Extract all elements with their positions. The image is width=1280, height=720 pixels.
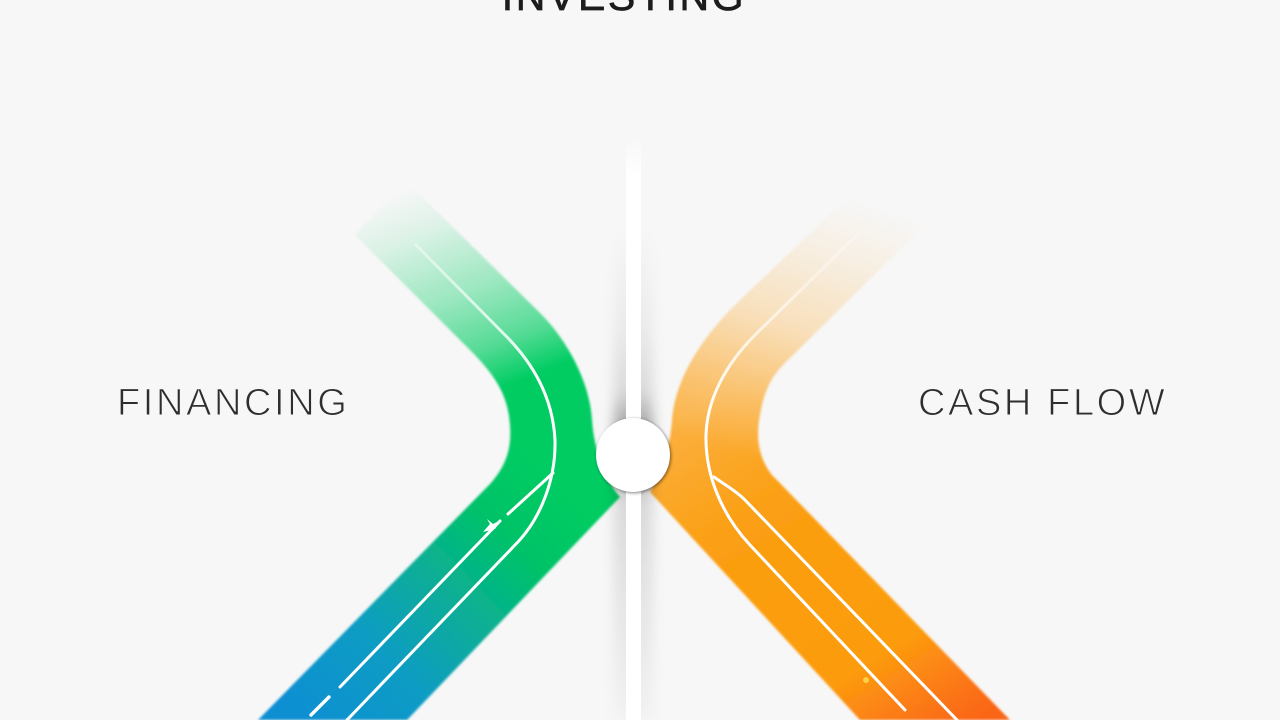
white lane line: long dash bbox=[340, 521, 500, 687]
ribbon body: cash flow path bbox=[650, 195, 1010, 720]
dot on lane bbox=[863, 677, 869, 683]
ribbon body: financing path bbox=[258, 180, 620, 720]
orange ribbon bbox=[650, 195, 1010, 720]
label: cash flow: CASH FLOW bbox=[918, 382, 1167, 424]
white lane line: branch bbox=[714, 477, 957, 720]
white mark on lane bbox=[483, 519, 501, 532]
green to blue ribbon bbox=[258, 180, 620, 720]
white lane line: branch bbox=[508, 473, 553, 514]
central divider with node bbox=[596, 137, 671, 720]
node circle bbox=[596, 418, 670, 492]
white lane line: short dash bbox=[311, 697, 329, 715]
vertical divider bar bbox=[626, 137, 641, 720]
divider shadow bbox=[614, 230, 653, 720]
node shadow bbox=[597, 419, 671, 493]
white lane line: main curve bbox=[347, 245, 555, 720]
white lane line: main curve bbox=[706, 232, 905, 710]
label: financing: FINANCING bbox=[117, 382, 349, 424]
